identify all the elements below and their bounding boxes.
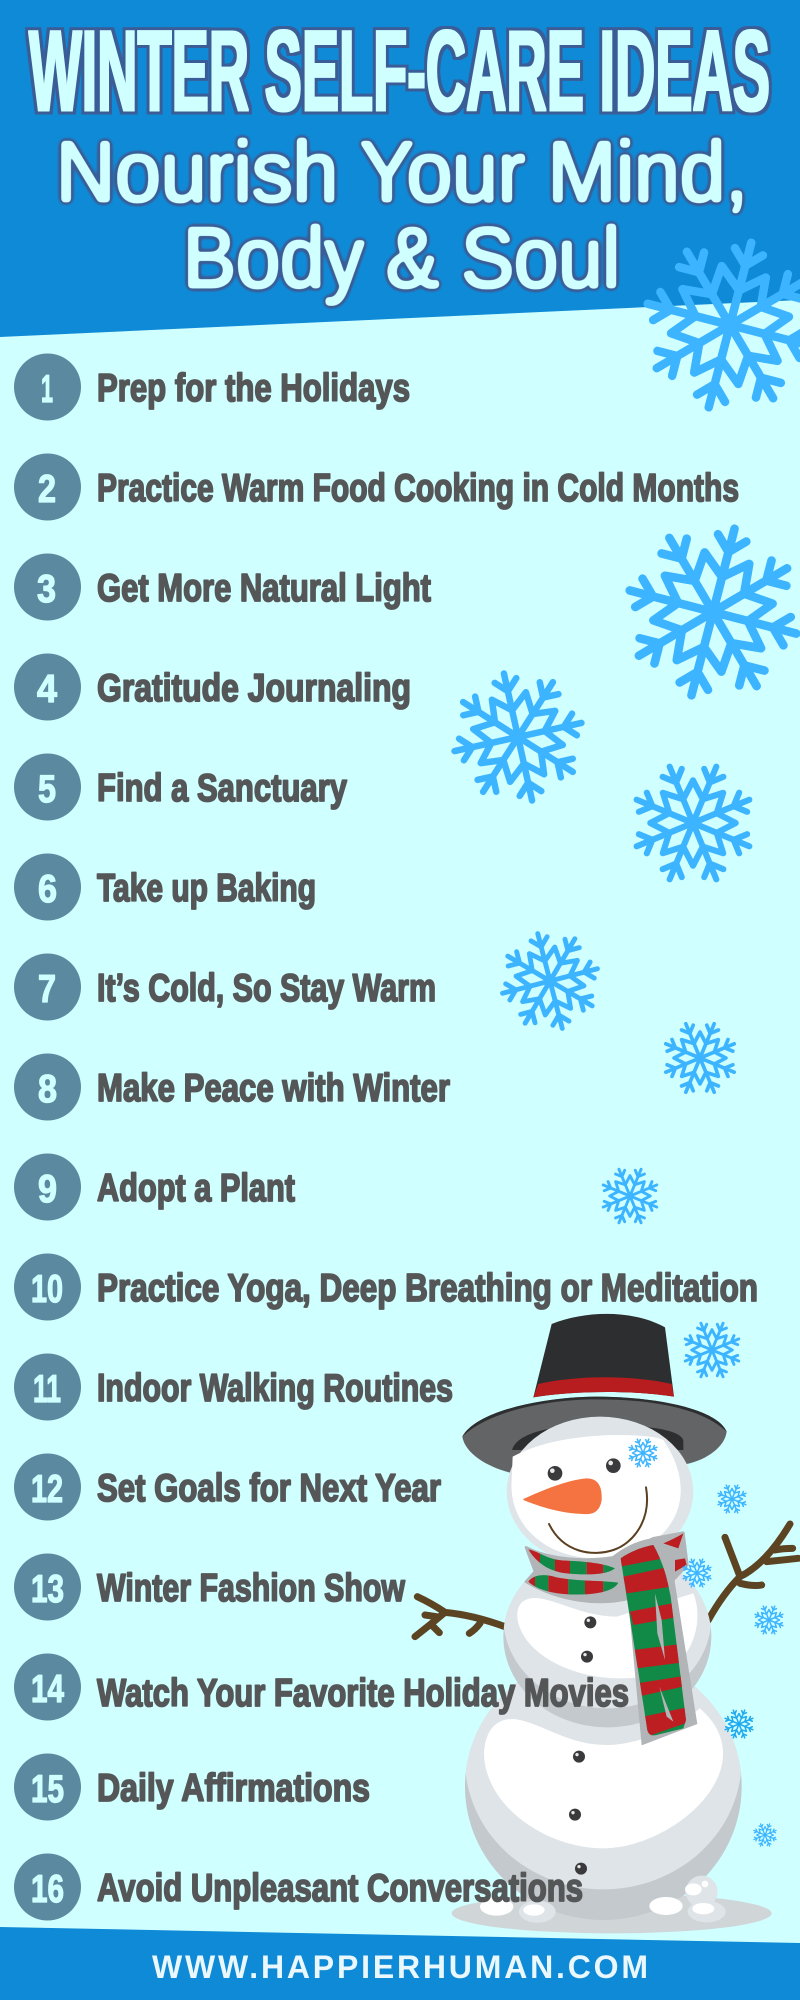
subtitle: Nourish Your Mind, xyxy=(56,125,748,220)
item 14 xyxy=(14,1654,629,1720)
snowflake lower right xyxy=(724,1709,754,1739)
snowflake right xyxy=(633,763,753,883)
item 4: 4 xyxy=(37,668,57,711)
item 5: Find a Sanctuary xyxy=(97,767,347,810)
item 12: 12 xyxy=(31,1468,63,1511)
item 8 xyxy=(14,1054,450,1120)
item 3: Get More Natural Light xyxy=(97,567,431,610)
item 3: 3 xyxy=(37,568,56,611)
snowflake on head xyxy=(628,1438,658,1468)
item 13: Winter Fashion Show xyxy=(97,1567,406,1610)
item 13: 13 xyxy=(31,1568,64,1611)
item 9 xyxy=(14,1154,295,1220)
snowflake top right xyxy=(635,230,800,420)
buttons xyxy=(569,1616,596,1875)
item 6 xyxy=(14,854,316,920)
item 1 xyxy=(14,354,410,420)
snowflake by scarf xyxy=(682,1558,712,1588)
snowflake by arm xyxy=(754,1605,784,1635)
item 7: It’s Cold, So Stay Warm xyxy=(97,967,436,1010)
item 7 xyxy=(14,954,436,1020)
hat crown xyxy=(533,1314,674,1397)
item 10 xyxy=(14,1254,758,1320)
item 9: 9 xyxy=(38,1168,57,1211)
item 2: 2 xyxy=(38,468,56,511)
item 4 xyxy=(14,654,411,720)
header banner xyxy=(0,0,800,337)
snow clumps xyxy=(480,1876,726,1923)
snowflake large right xyxy=(617,516,800,708)
snowflake centre xyxy=(444,663,592,811)
item 3 xyxy=(14,554,431,620)
subtitle xyxy=(56,125,748,306)
item 5 xyxy=(14,754,347,820)
item 12 xyxy=(14,1454,441,1520)
item 2 xyxy=(14,454,739,520)
snowflake mid xyxy=(495,926,605,1036)
item 14: Watch Your Favorite Holiday Movies xyxy=(97,1672,629,1715)
subtitle: Body & Soul xyxy=(183,211,620,306)
middle snowball xyxy=(503,1573,712,1728)
snowflake near hat xyxy=(683,1321,741,1379)
bottom snowball xyxy=(465,1682,742,1920)
item 1: Prep for the Holidays xyxy=(97,367,410,410)
item 6: 6 xyxy=(38,868,57,911)
item 10: 10 xyxy=(31,1268,63,1311)
eyes xyxy=(548,1458,621,1481)
item 1: 1 xyxy=(41,368,53,411)
item 11 xyxy=(14,1354,453,1420)
item 8: Make Peace with Winter xyxy=(97,1067,450,1110)
item 16 xyxy=(14,1854,583,1920)
item 15: 15 xyxy=(31,1768,64,1811)
item 8: 8 xyxy=(38,1068,57,1111)
item 6: Take up Baking xyxy=(97,867,316,910)
item 12: Set Goals for Next Year xyxy=(97,1467,441,1510)
ground shadow xyxy=(452,1893,772,1933)
head xyxy=(507,1417,693,1567)
hat underside xyxy=(512,1425,683,1450)
scarf xyxy=(526,1533,700,1750)
numbered list xyxy=(14,354,758,1920)
snowman illustration xyxy=(415,1314,798,1933)
hat brim xyxy=(462,1397,727,1473)
item 16: Avoid Unpleasant Conversations xyxy=(97,1867,583,1910)
snowflake right of head xyxy=(717,1484,747,1514)
item 4: Gratitude Journaling xyxy=(97,667,411,710)
item 9: Adopt a Plant xyxy=(97,1167,295,1210)
item 15 xyxy=(14,1754,370,1820)
item 13 xyxy=(14,1554,406,1620)
item 5: 5 xyxy=(38,768,56,811)
item 7: 7 xyxy=(38,968,56,1011)
item 16: 16 xyxy=(31,1868,64,1911)
snowflake small centre xyxy=(601,1167,659,1225)
item 11: 11 xyxy=(33,1368,61,1411)
hat band xyxy=(533,1377,674,1397)
item 11: Indoor Walking Routines xyxy=(97,1367,453,1410)
smile xyxy=(549,1487,647,1553)
carrot nose xyxy=(523,1478,602,1514)
snowflake bottom right xyxy=(753,1823,777,1847)
snowflakes xyxy=(444,230,800,1847)
snowman arms xyxy=(415,1524,798,1637)
snowflake small right xyxy=(663,1021,737,1095)
footer band: WWW.HAPPIERHUMAN.COM xyxy=(152,1949,648,1985)
item 14: 14 xyxy=(31,1668,64,1711)
item 15: Daily Affirmations xyxy=(97,1767,370,1810)
footer band xyxy=(0,1927,800,2000)
